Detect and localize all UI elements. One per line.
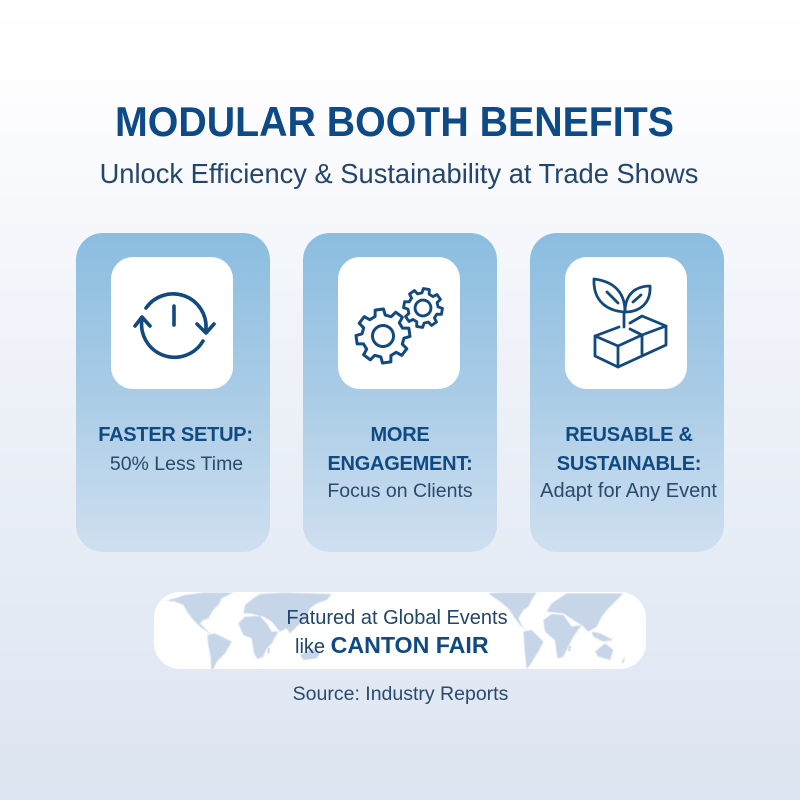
heading: SUSTAINABLE: [557, 452, 701, 474]
icon: gears [338, 257, 460, 389]
heading: REUSABLE & [565, 424, 693, 446]
banner text line 2: like CANTON FAIR [295, 632, 489, 658]
heading: ENGAGEMENT: [327, 452, 473, 474]
panel: more engagement [303, 233, 497, 552]
panel: faster setup [76, 233, 270, 552]
icon: clock with cycle arrows [111, 257, 233, 389]
description: Adapt for Any Event [540, 480, 717, 502]
description: Focus on Clients [327, 480, 473, 502]
heading: FASTER SETUP: [98, 424, 253, 446]
heading [327, 424, 473, 474]
banner text line 1: Fatured at Global Events [286, 607, 508, 629]
world map background [167, 592, 626, 669]
panel: reusable and sustainable [530, 233, 724, 552]
title: MODULAR BOOTH BENEFITS [115, 98, 674, 145]
panel: global events banner [154, 592, 646, 669]
heading: MORE [370, 424, 430, 446]
subtitle: Unlock Efficiency & Sustainability at Trade Shows [100, 158, 698, 189]
icon: plant growing from blocks [565, 257, 687, 389]
description: 50% Less Time [110, 453, 243, 475]
heading [557, 424, 701, 474]
source: Source: Industry Reports [293, 683, 508, 705]
